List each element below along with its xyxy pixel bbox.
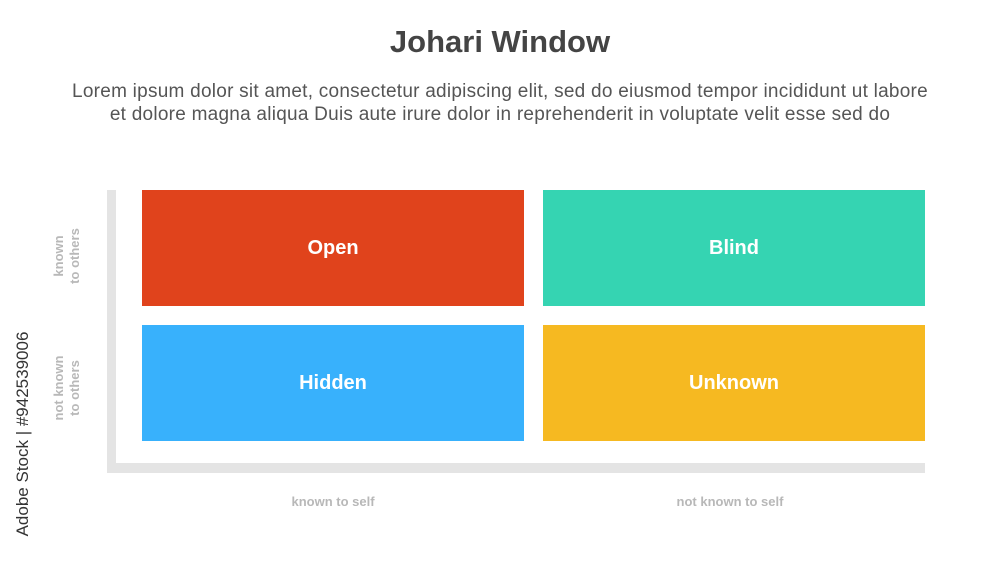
label: not known to self: not known to self (677, 494, 783, 509)
box: open: Open (307, 236, 359, 258)
label: not known to others: not known (51, 356, 66, 420)
label: known to others: to others (67, 228, 82, 284)
vertical axis (107, 190, 116, 473)
label: known to self: known to self (291, 494, 375, 509)
box: blind (543, 190, 925, 306)
description text (72, 81, 928, 125)
description text: Lorem ipsum dolor sit amet, consectetur adipiscing elit, sed do eiusmod tempor incididunt ut labore (72, 81, 928, 102)
description text: et dolore magna aliqua Duis aute irure dolor in reprehenderit in voluptate velit esse sed do (110, 104, 890, 125)
horizontal axis (107, 463, 925, 473)
box: open (142, 190, 524, 306)
label: known to others: known (51, 235, 66, 277)
title: Johari Window (390, 24, 610, 59)
box: unknown (543, 325, 925, 441)
label: known to others (51, 228, 82, 284)
box: hidden (142, 325, 524, 441)
stock caption: Adobe Stock | #942539006 (13, 332, 32, 536)
label: not known to others: to others (67, 360, 82, 416)
box: blind: Blind (709, 236, 759, 258)
box: unknown: Unknown (689, 372, 779, 394)
label: not known to others (51, 356, 82, 420)
box: hidden: Hidden (299, 372, 367, 394)
